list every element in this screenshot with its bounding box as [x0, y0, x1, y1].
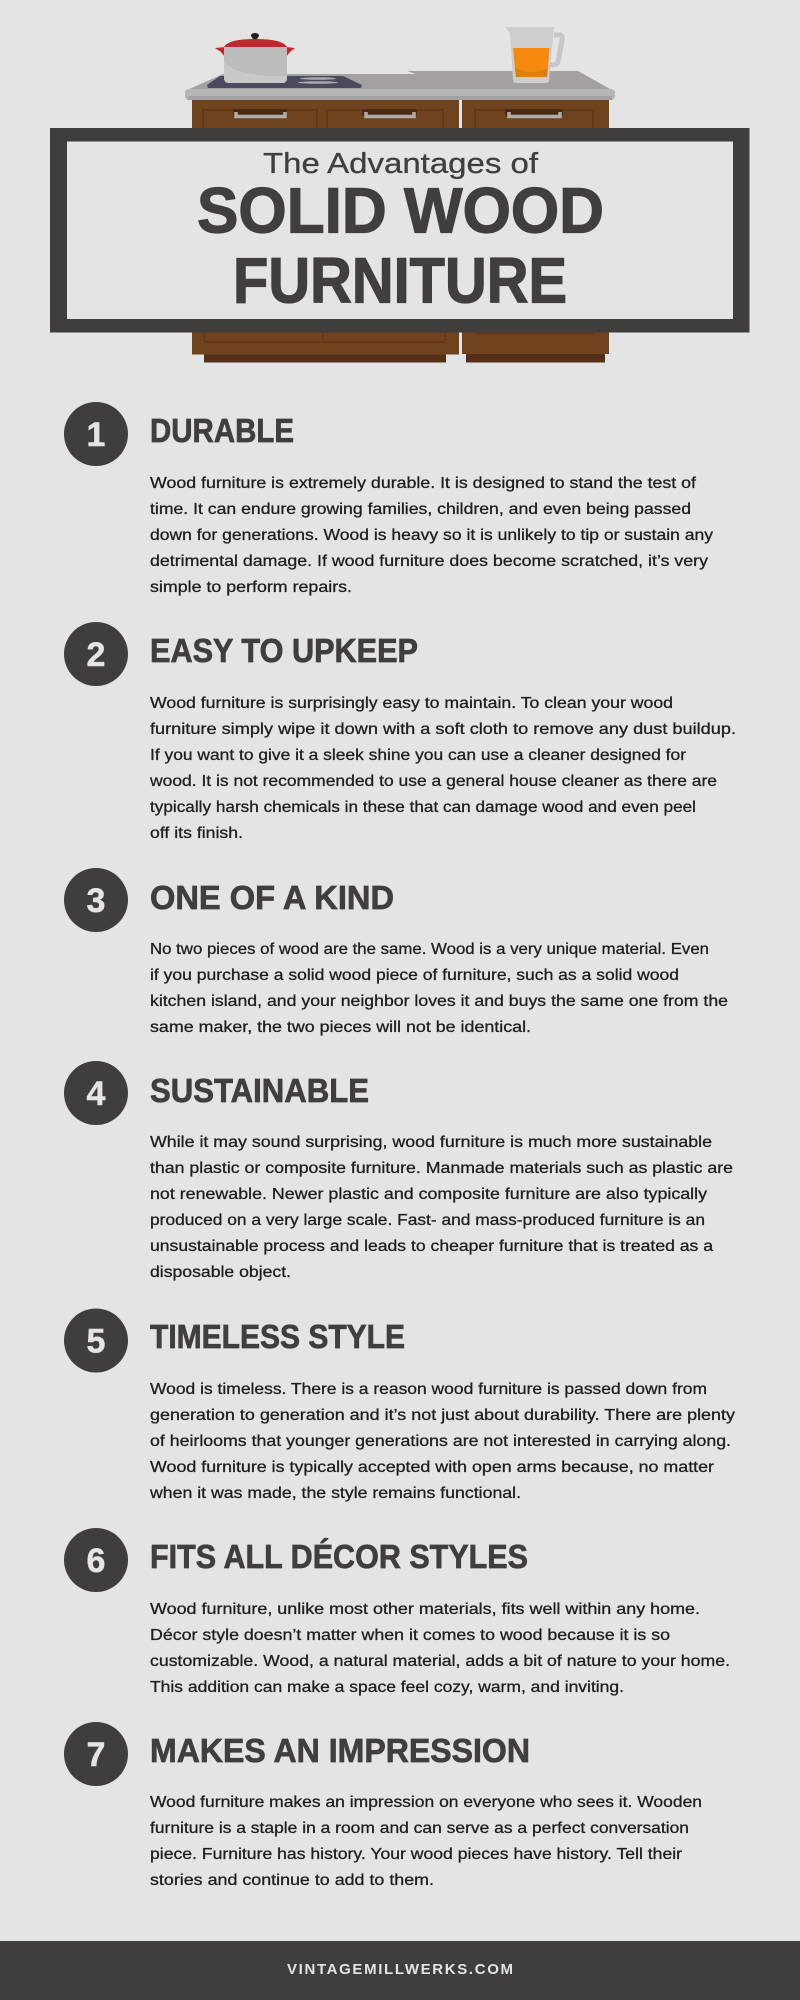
- body text: furniture simply wipe it down with a soft cloth to remove any dust buildup.: [150, 721, 736, 738]
- heading: FITS ALL DÉCOR STYLES: [150, 1538, 528, 1575]
- body text: kitchen island, and your neighbor loves it and buys the same one from the: [150, 993, 728, 1010]
- body text: customizable. Wood, a natural material, adds a bit of nature to your home.: [150, 1653, 730, 1670]
- section 5: timeless style: [64, 1308, 735, 1502]
- number badge 3: 3: [87, 882, 105, 920]
- body text: [149, 695, 736, 842]
- number badge 3: [64, 868, 128, 932]
- section 3: one of a kind: [64, 868, 728, 1036]
- body text: Wood furniture is extremely durable. It is designed to stand the test of: [150, 475, 697, 492]
- body text: unsustainable process and leads to cheaper furniture that is treated as a: [150, 1238, 713, 1255]
- icon: juice pitcher: [505, 27, 562, 83]
- body text: furniture is a staple in a room and can serve as a perfect conversation: [150, 1820, 689, 1837]
- number badge 6: [64, 1528, 128, 1592]
- body text: [150, 1794, 702, 1889]
- body text: not renewable. Newer plastic and composite furniture are also typically: [150, 1186, 707, 1203]
- body text: [150, 475, 713, 596]
- body text: This addition can make a space feel cozy, warm, and inviting.: [150, 1679, 624, 1696]
- heading: EASY TO UPKEEP: [150, 632, 418, 669]
- body text: if you purchase a solid wood piece of furniture, such as a solid wood: [150, 967, 679, 984]
- body text: same maker, the two pieces will not be identical.: [150, 1019, 531, 1036]
- body text: If you want to give it a sleek shine you can use a cleaner designed for: [150, 747, 687, 764]
- number badge 7: [64, 1722, 128, 1786]
- drawer handles: [233, 109, 563, 116]
- number badge 5: [64, 1308, 128, 1372]
- body text: piece. Furniture has history. Your wood pieces have history. Tell their: [150, 1846, 683, 1863]
- section 6: fits all decor styles: [64, 1528, 730, 1696]
- body text: detrimental damage. If wood furniture does become scratched, it’s very: [150, 553, 708, 570]
- body text: While it may sound surprising, wood furniture is much more sustainable: [150, 1134, 712, 1151]
- body text: Wood furniture, unlike most other materials, fits well within any home.: [150, 1601, 700, 1618]
- body text: when it was made, the style remains functional.: [149, 1485, 521, 1502]
- body text: off its finish.: [150, 825, 243, 842]
- body text: simple to perform repairs.: [150, 579, 352, 596]
- lower cabinets: [192, 330, 609, 362]
- number badge 4: 4: [87, 1075, 106, 1113]
- number badge 1: 1: [87, 416, 105, 454]
- section 4: sustainable: [64, 1061, 733, 1281]
- footer bar: [0, 1941, 800, 2000]
- number badge 6: 6: [87, 1542, 105, 1580]
- body text: [150, 1134, 733, 1281]
- body text: Wood is timeless. There is a reason wood furniture is passed down from: [150, 1381, 707, 1398]
- body text: No two pieces of wood are the same. Wood is a very unique material. Even: [150, 941, 709, 958]
- countertop surface: [185, 71, 615, 100]
- icon: cooking pot: [215, 33, 295, 83]
- body text: Wood furniture makes an impression on everyone who sees it. Wooden: [150, 1794, 702, 1811]
- heading: SUSTAINABLE: [150, 1072, 369, 1109]
- number badge 1: [64, 402, 128, 466]
- body text: Wood furniture is surprisingly easy to maintain. To clean your wood: [150, 695, 673, 712]
- body text: Wood furniture is typically accepted with open arms because, no matter: [150, 1459, 715, 1476]
- footer website text: VINTAGEMILLWERKS.COM: [287, 1961, 513, 1978]
- body text: wood. It is not recommended to use a general house cleaner as there are: [149, 773, 717, 790]
- body text: produced on a very large scale. Fast- and mass-produced furniture is an: [150, 1212, 705, 1229]
- number badge 2: 2: [87, 636, 105, 674]
- section 2: easy to upkeep: [64, 622, 736, 842]
- illustration: kitchen counter: [185, 27, 615, 362]
- heading: ONE OF A KIND: [150, 879, 394, 916]
- number badge 2: [64, 622, 128, 686]
- body text: than plastic or composite furniture. Manmade materials such as plastic are: [150, 1160, 733, 1177]
- number badge 7: 7: [87, 1736, 105, 1774]
- heading: TIMELESS STYLE: [150, 1318, 405, 1355]
- body text: stories and continue to add to them.: [150, 1872, 434, 1889]
- frame border: [50, 128, 750, 332]
- body text: down for generations. Wood is heavy so it is unlikely to tip or sustain any: [150, 527, 713, 544]
- heading: MAKES AN IMPRESSION: [150, 1732, 530, 1769]
- number badge 5: 5: [87, 1322, 105, 1360]
- body text: generation to generation and it’s not just about durability. There are plenty: [150, 1407, 735, 1424]
- title line 1: SOLID WOOD: [197, 174, 604, 246]
- section 1: durable: [64, 402, 713, 596]
- body text: Décor style doesn’t matter when it comes to wood because it is so: [150, 1627, 670, 1644]
- body text: of heirlooms that younger generations are not interested in carrying along.: [150, 1433, 731, 1450]
- body text: time. It can endure growing families, children, and even being passed: [150, 501, 691, 518]
- heading: DURABLE: [150, 412, 294, 449]
- body text: [150, 1601, 730, 1696]
- stove top: [207, 76, 362, 88]
- body text: [149, 1381, 735, 1502]
- body text: typically harsh chemicals in these that can damage wood and even peel: [150, 799, 696, 816]
- upper cabinets: [192, 100, 609, 130]
- title line 2: FURNITURE: [233, 244, 567, 316]
- number badge 4: [64, 1061, 128, 1125]
- body text: disposable object.: [150, 1264, 291, 1281]
- subtitle: The Advantages of: [263, 148, 539, 180]
- body text: [150, 941, 728, 1036]
- title frame: [50, 128, 750, 332]
- section 7: makes an impression: [64, 1722, 702, 1889]
